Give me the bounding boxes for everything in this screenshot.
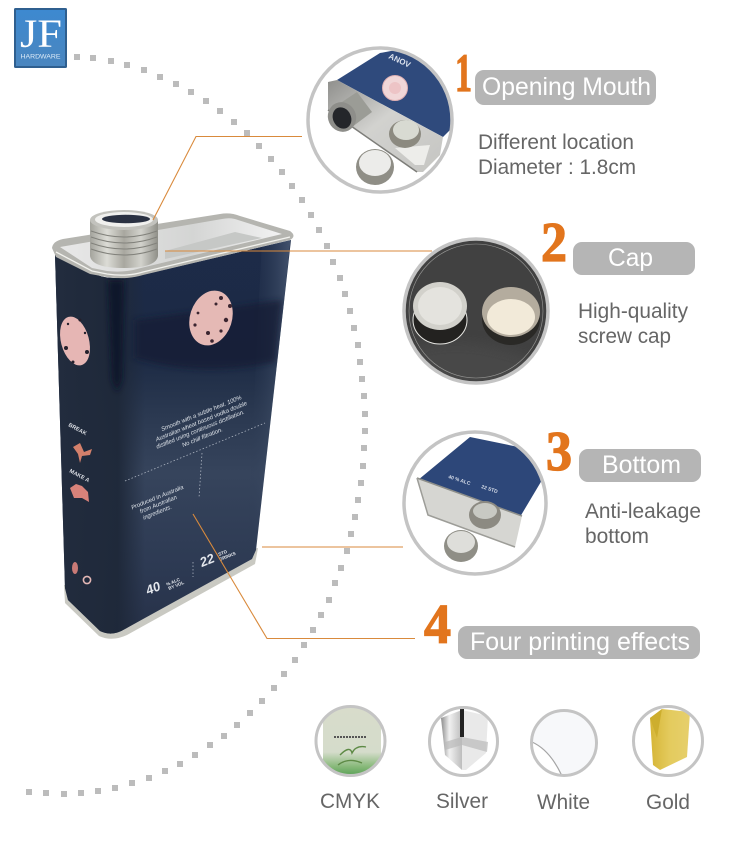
swatch: Gold [633, 706, 703, 814]
pink pattern right [189, 290, 233, 346]
can threaded neck [90, 210, 158, 268]
can printed copy: BREAK [67, 422, 87, 437]
can body [55, 240, 291, 634]
can printed copy: distilled using continuous distillation. [156, 410, 246, 451]
pill: Cap [573, 242, 695, 275]
description: cap [578, 300, 688, 348]
can printed copy: from Australian [139, 495, 179, 515]
description: cap: screw cap [578, 325, 671, 348]
detail circle 2: cap photo [404, 239, 548, 390]
swatch: White: White [537, 791, 590, 814]
logo: JF Hardware [14, 8, 67, 68]
swatch: White [531, 710, 597, 814]
description: bottom: Anti-leakage [585, 500, 701, 523]
can printed copy: % ALC [166, 577, 181, 587]
detail circle 3: bottom photo: 40 % ALC [447, 474, 471, 487]
pill: Bottom: Bottom [602, 451, 681, 479]
pill: Cap: Cap [608, 244, 653, 272]
detail circle 1: opening mouth photo [308, 45, 460, 192]
can printed copy: STD [218, 549, 228, 557]
logo: JF Hardware: JF [20, 11, 62, 56]
heading number 4: 4 [424, 594, 451, 656]
description: opening mouth: Different location [478, 131, 634, 154]
leader line 2 [165, 250, 432, 252]
can top tray and rim [52, 213, 294, 278]
swatch: Silver [429, 707, 499, 813]
swatch: Silver: Silver [436, 790, 488, 813]
can printed copy: BY VOL [168, 580, 185, 591]
heading number 3: 3 [546, 421, 572, 483]
can printed copy: Produced in Australia [131, 485, 185, 511]
can printed copy: 22 [197, 550, 217, 570]
swatch: CMYK: CMYK [320, 790, 380, 813]
description: cap: High-quality [578, 300, 688, 323]
can printed copy: Australian wheat based vodka double [154, 401, 249, 444]
can printed copy: No chill filtration. [181, 427, 224, 449]
can bottom rim [64, 548, 258, 639]
can printed copy: MAKE A [68, 468, 90, 484]
can printed copy: Smooth with a subtle heat. 100% [161, 395, 243, 433]
can printed copy [67, 395, 265, 598]
can printed copy: ingredients. [142, 505, 173, 522]
swatch: Gold: Gold [646, 791, 690, 814]
detail circle 3: bottom photo: 22 STD [480, 484, 499, 495]
description: opening mouth: Diameter : 1.8cm [478, 156, 636, 179]
can printed copy: 40 [143, 578, 163, 598]
swatch: CMYK [315, 704, 387, 813]
heading number 2: 2 [541, 212, 567, 274]
description: bottom [585, 500, 701, 548]
tin can [50, 210, 300, 650]
detail circle 1: opening mouth photo: ANOV [387, 52, 413, 70]
pill: Opening Mouth: Opening Mouth [482, 73, 651, 101]
leader line 4 [193, 514, 415, 638]
pink pattern left [60, 316, 90, 366]
logo: JF Hardware: HARDWARE [20, 54, 60, 60]
description: opening mouth [478, 131, 636, 179]
leader line 1 [153, 136, 302, 220]
dotted arc [26, 54, 368, 797]
pill: Four printing effects: Four printing effects [470, 628, 690, 656]
leader line 3 [262, 546, 403, 548]
description: bottom: bottom [585, 525, 649, 548]
pill: Bottom [579, 449, 701, 482]
can printed copy: DRINKS [219, 551, 236, 562]
detail circle 3: bottom photo [404, 432, 546, 574]
heading number 1: 1 [455, 43, 472, 103]
